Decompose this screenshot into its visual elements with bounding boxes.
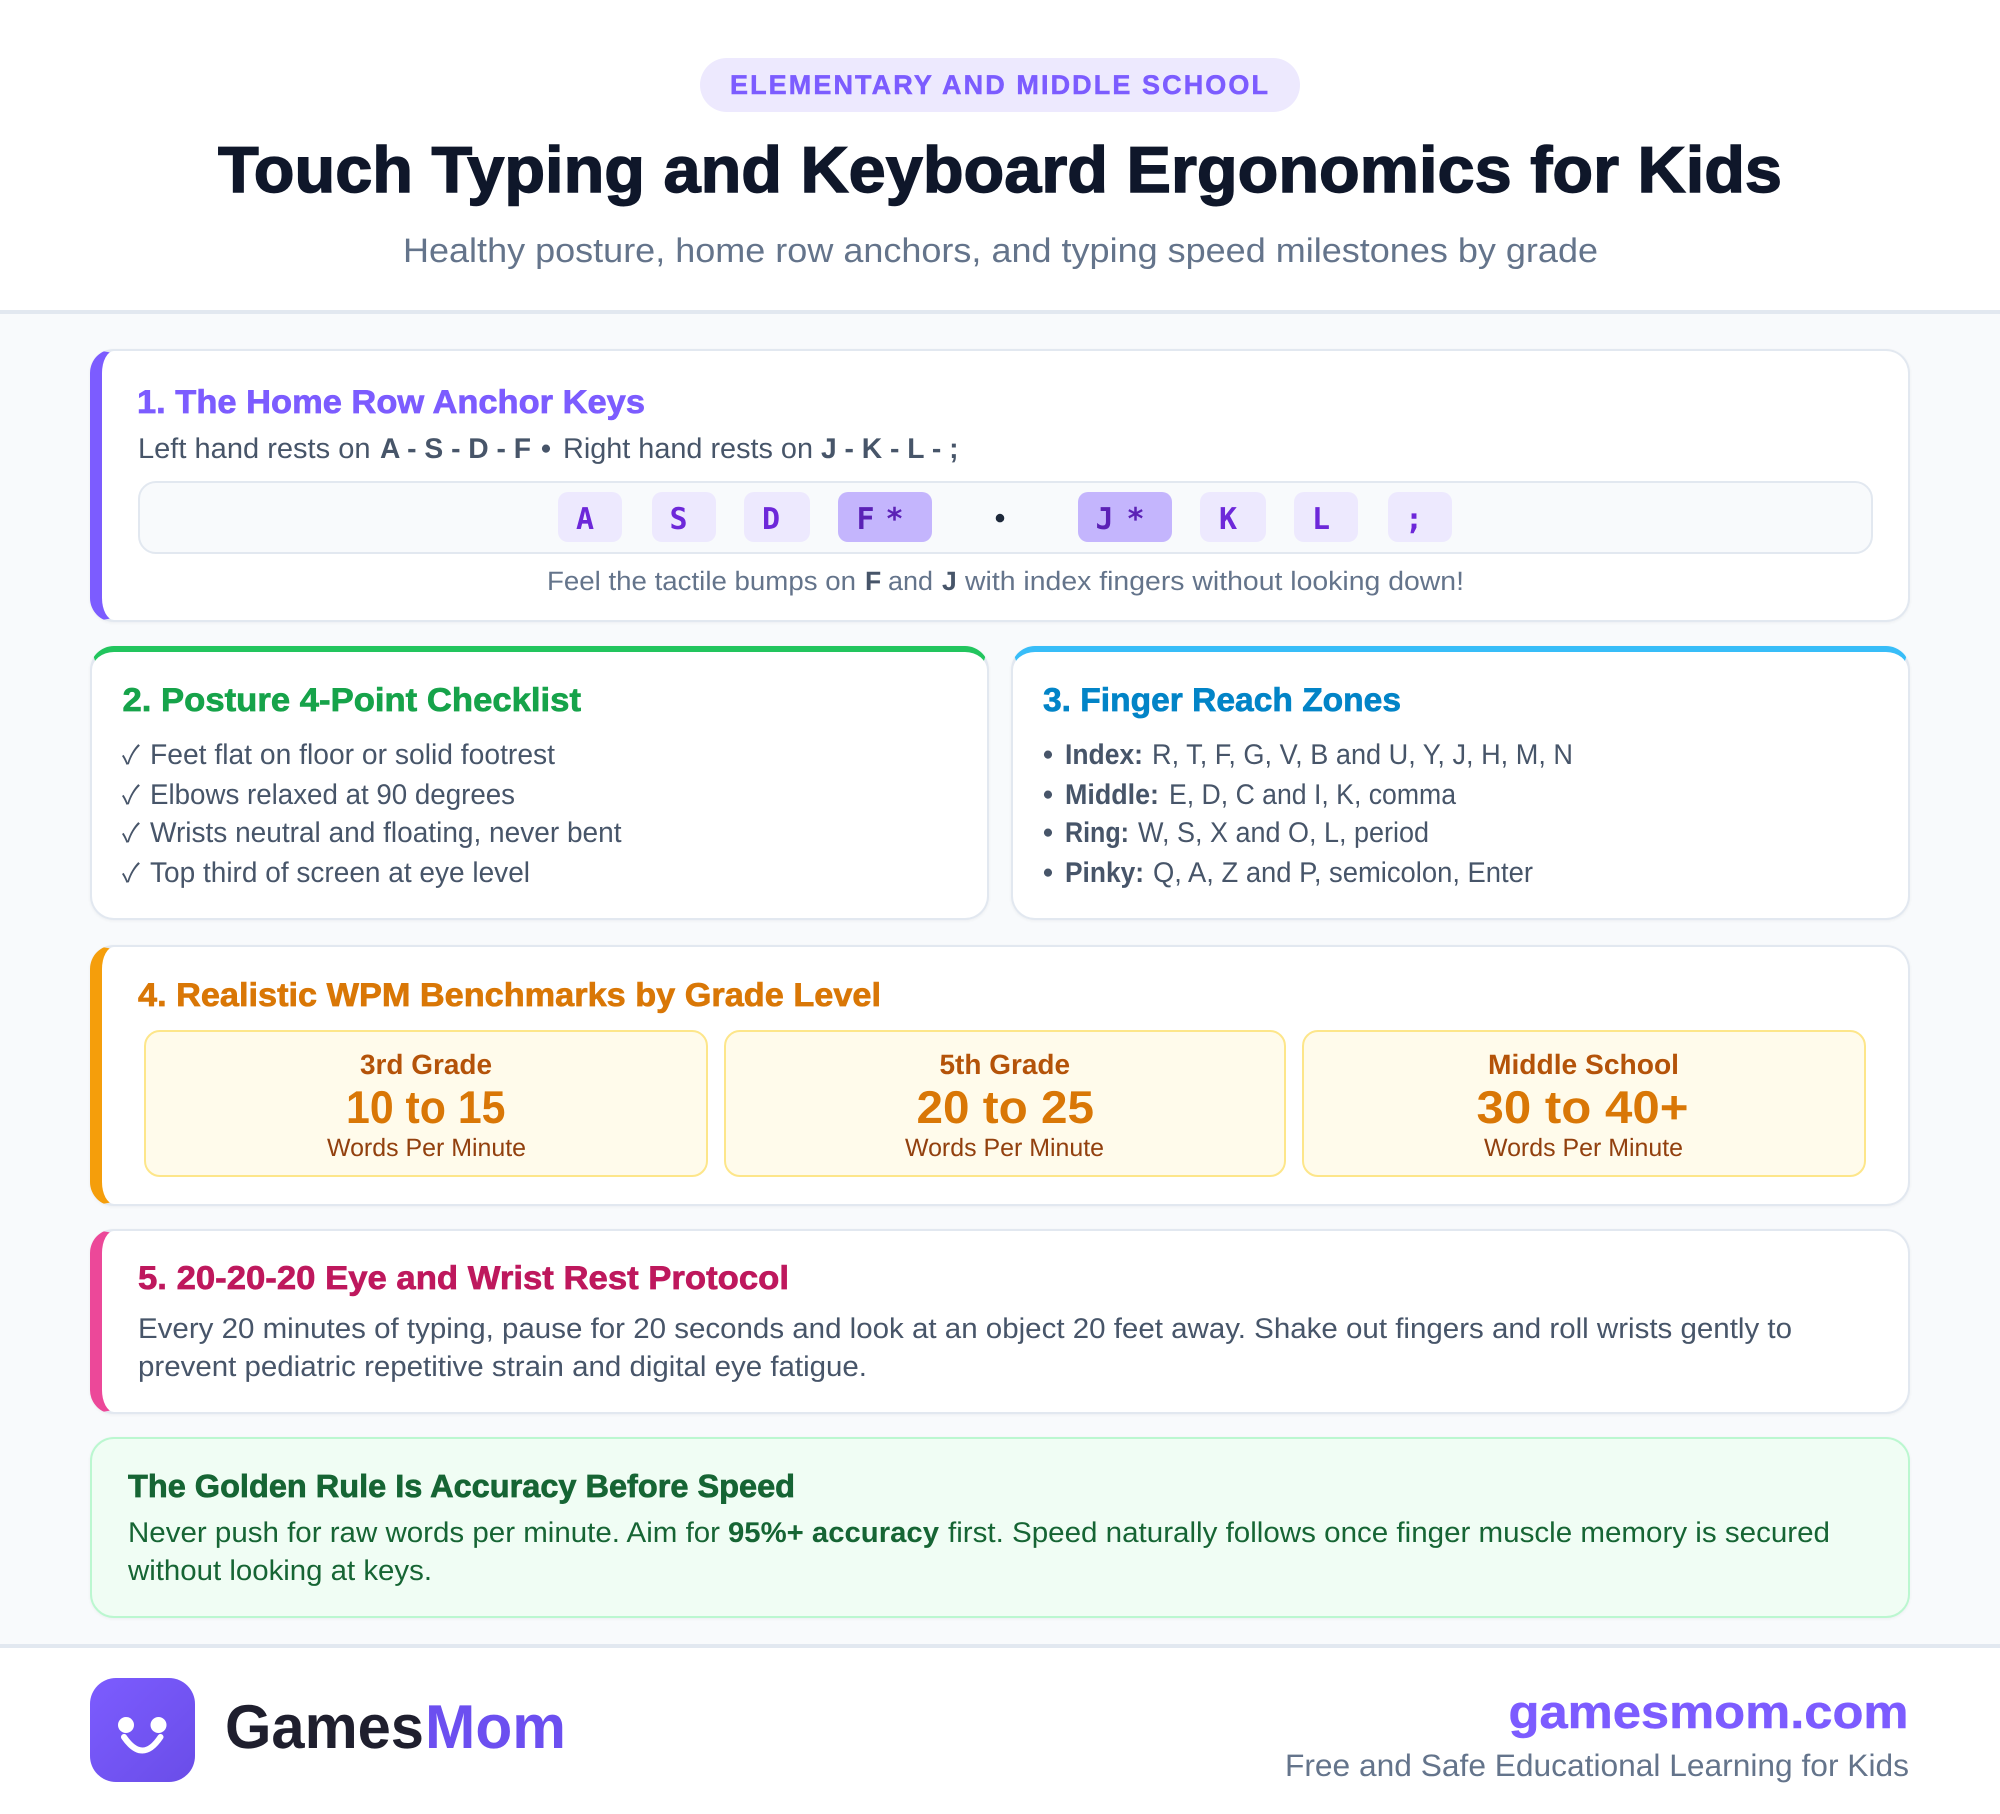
panel: posture checklist — [90, 646, 989, 920]
key labels: * — [886, 502, 904, 537]
text: hand placement: Left hand rests on — [138, 433, 370, 465]
key labels — [576, 502, 1423, 537]
finger zone list: • — [1043, 857, 1053, 889]
header — [0, 0, 2000, 314]
benchmark card: middle school: Middle School — [1488, 1049, 1679, 1080]
text: golden rule description: Never push for raw words per minute. Aim for — [128, 1517, 721, 1549]
benchmark card: middle school: 30 to 40+ — [1476, 1081, 1688, 1133]
finger zone list: Pinky: — [1065, 857, 1144, 889]
callout: golden rule — [90, 1437, 1910, 1618]
benchmark card: 5th grade — [724, 1030, 1286, 1177]
heading: posture checklist: 2. Posture 4-Point Checklist — [122, 681, 581, 718]
note: tactile bumps: J — [942, 566, 957, 596]
key labels: S — [670, 502, 688, 537]
checklist: Elbows relaxed at 90 degrees — [150, 779, 515, 811]
benchmark card: 5th grade: 5th Grade — [940, 1049, 1070, 1080]
key labels: J — [1096, 502, 1114, 537]
key labels: • — [995, 502, 1005, 535]
text: golden rule description — [127, 1517, 1830, 1587]
benchmark card: 3rd grade — [144, 1030, 708, 1177]
key labels: A — [576, 502, 594, 537]
text: rest protocol description: Every 20 minutes of typing, pause for 20 seconds and look at an object 20 feet away. Shake out fingers and roll wrists gently to — [138, 1313, 1792, 1345]
benchmark card: 3rd grade: 10 to 15 — [346, 1081, 506, 1133]
text: rest protocol description: prevent pediatric repetitive strain and digital eye fatigue. — [138, 1351, 867, 1383]
benchmark card: 5th grade: Words Per Minute — [905, 1134, 1104, 1162]
wordmark: GamesMom: Games — [225, 1693, 424, 1762]
text: golden rule description: without looking at keys. — [127, 1555, 432, 1587]
heading: finger reach zones: 3. Finger Reach Zones — [1043, 681, 1401, 718]
key labels: * — [1126, 502, 1145, 537]
text: hand placement: J - K - L - ; — [821, 433, 958, 465]
finger zone list: • — [1043, 817, 1053, 849]
key labels: ; — [1405, 502, 1423, 537]
wordmark: GamesMom — [225, 1693, 566, 1762]
note: tactile bumps: and — [888, 566, 933, 596]
panel: WPM benchmarks — [90, 945, 1910, 1206]
checklist: Top third of screen at eye level — [150, 857, 530, 889]
checklist: Wrists neutral and floating, never bent — [150, 817, 622, 849]
panel: home row anchor keys — [90, 349, 1910, 622]
panel: finger reach zones — [1011, 646, 1910, 920]
badge: elementary and middle school — [700, 58, 1300, 112]
text: rest protocol description — [138, 1313, 1792, 1383]
checklist: ✓ — [122, 853, 140, 890]
badge: elementary and middle school: ELEMENTARY AND MIDDLE SCHOOL — [730, 70, 1268, 100]
subtitle: Healthy posture, home row anchors, and typing speed milestones by grade — [403, 232, 1598, 270]
finger zone list: E, D, C and I, K, comma — [1169, 779, 1456, 811]
benchmark card: 3rd grade: Words Per Minute — [327, 1134, 526, 1162]
wordmark: GamesMom: Mom — [425, 1693, 566, 1762]
benchmark card: middle school — [1302, 1030, 1866, 1177]
keyboard strip — [138, 481, 1873, 554]
note: tactile bumps — [547, 566, 1464, 596]
key labels: F — [856, 502, 875, 537]
checklist — [122, 735, 622, 890]
finger zone list — [1043, 739, 1573, 889]
finger zone list: Middle: — [1065, 779, 1159, 811]
benchmark card: middle school: Words Per Minute — [1484, 1134, 1683, 1162]
note: tactile bumps: with index fingers without looking down! — [964, 566, 1464, 596]
text: golden rule description: 95%+ accuracy — [728, 1517, 939, 1549]
text: hand placement — [138, 433, 958, 465]
checklist: ✓ — [122, 775, 140, 812]
heading: golden rule: The Golden Rule Is Accuracy Before Speed — [128, 1468, 795, 1504]
benchmark card: 5th grade: 20 to 25 — [916, 1081, 1094, 1133]
finger zone list: W, S, X and O, L, period — [1138, 817, 1429, 849]
finger zone list: • — [1043, 739, 1053, 771]
text: hand placement: A - S - D - F — [380, 433, 531, 465]
text: golden rule description: first. Speed naturally follows once finger muscle memory is secured — [948, 1517, 1830, 1549]
finger zone list: Q, A, Z and P, semicolon, Enter — [1153, 857, 1533, 889]
icon: smiling logo — [90, 1678, 195, 1782]
text: hand placement: • — [541, 433, 551, 465]
note: tactile bumps: F — [865, 566, 881, 596]
checklist: Feet flat on floor or solid footrest — [150, 739, 555, 771]
finger zone list: R, T, F, G, V, B and U, Y, J, H, M, N — [1152, 739, 1573, 771]
checklist: ✓ — [122, 813, 140, 850]
key labels: L — [1312, 502, 1330, 537]
finger zone list: Ring: — [1065, 817, 1129, 849]
text: hand placement: Right hand rests on — [563, 433, 813, 465]
footer — [0, 1644, 2000, 1814]
note: tactile bumps: Feel the tactile bumps on — [547, 566, 856, 596]
key labels: D — [762, 502, 780, 537]
heading: WPM benchmarks: 4. Realistic WPM Benchmarks by Grade Level — [138, 976, 881, 1013]
finger zone list: Index: — [1065, 739, 1143, 771]
heading: rest protocol: 5. 20-20-20 Eye and Wrist Rest Protocol — [138, 1259, 789, 1296]
checklist: ✓ — [122, 735, 140, 772]
tagline: Free and Safe Educational Learning for Kids — [1285, 1748, 1909, 1783]
benchmark card: 3rd grade: 3rd Grade — [360, 1049, 492, 1080]
finger zone list: • — [1043, 779, 1053, 811]
website url: gamesmom.com — [1508, 1685, 1908, 1738]
title: Touch Typing and Keyboard Ergonomics for Kids — [218, 133, 1782, 206]
panel: 20-20-20 rest protocol — [90, 1229, 1910, 1414]
key labels: K — [1219, 502, 1237, 537]
heading: home row anchor keys: 1. The Home Row Anchor Keys — [137, 383, 645, 420]
